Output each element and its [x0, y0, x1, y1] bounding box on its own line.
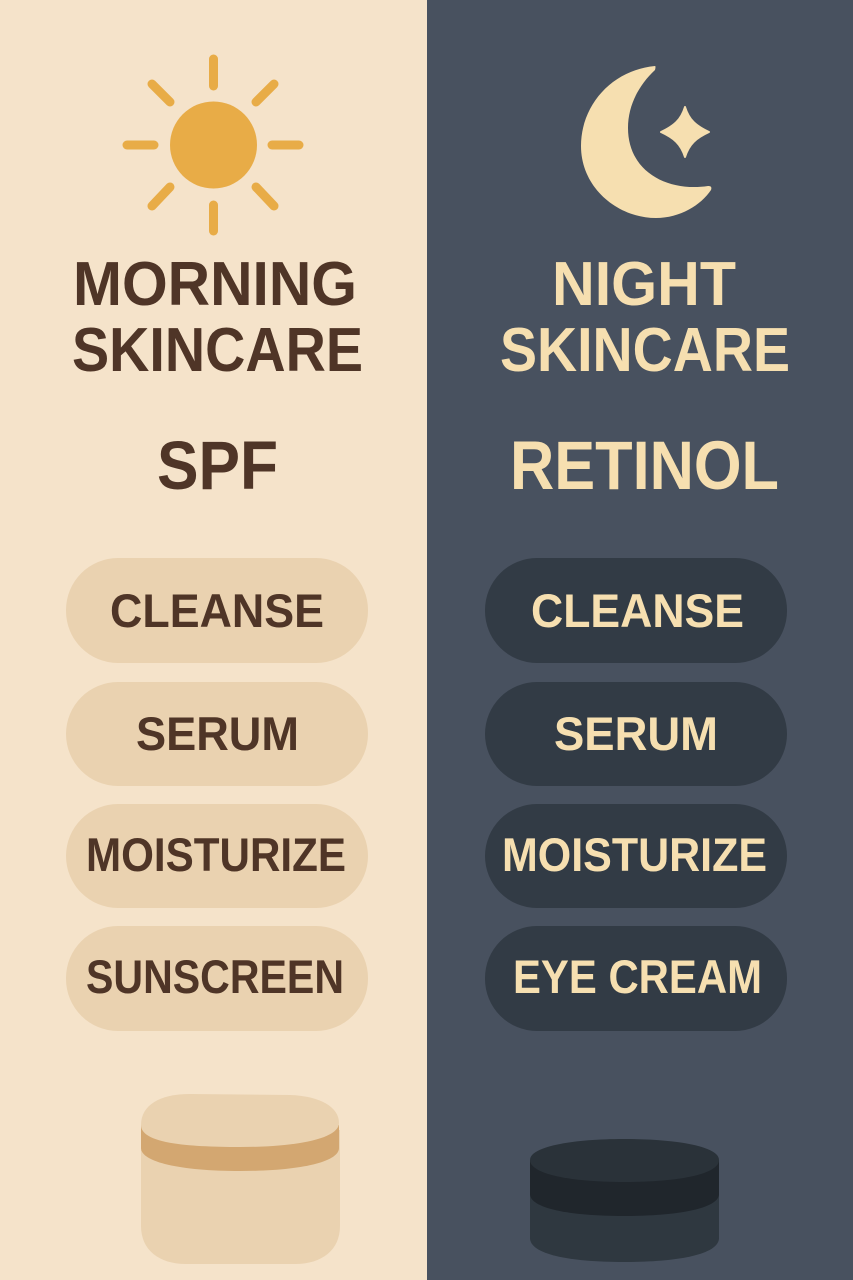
step: sunscreen	[66, 926, 368, 1031]
step: serum: SERUM	[554, 707, 718, 760]
step: eye cream	[485, 926, 787, 1031]
heading: morning skincare	[72, 250, 363, 385]
heading: morning skincare: MORNING	[73, 250, 357, 319]
panel: morning	[0, 0, 427, 1280]
icon: night jar	[530, 1139, 719, 1262]
step: serum	[485, 682, 787, 786]
step: cleanse: CLEANSE	[110, 584, 324, 637]
heading: SPF: SPF	[157, 427, 278, 504]
icon: moon and star	[581, 66, 711, 218]
step: sunscreen: SUNSCREEN	[86, 950, 344, 1003]
heading: retinol: RETINOL	[510, 427, 779, 504]
icon: sun	[127, 59, 299, 231]
heading: night skincare: SKINCARE	[500, 316, 790, 385]
step: serum: SERUM	[136, 707, 299, 760]
step: serum	[66, 682, 368, 786]
heading: night skincare	[500, 250, 790, 385]
step: cleanse	[485, 558, 787, 663]
step: moisturize	[485, 804, 787, 908]
icon: morning jar	[141, 1094, 340, 1264]
step: eye cream: EYE CREAM	[513, 950, 762, 1003]
step: moisturize: MOISTURIZE	[86, 828, 346, 881]
panel: night	[427, 0, 853, 1280]
step: cleanse: CLEANSE	[531, 584, 744, 637]
heading: night skincare: NIGHT	[552, 250, 736, 319]
heading: morning skincare: SKINCARE	[72, 316, 363, 385]
step: moisturize	[66, 804, 368, 908]
step: moisturize: MOISTURIZE	[502, 828, 767, 881]
step: cleanse	[66, 558, 368, 663]
